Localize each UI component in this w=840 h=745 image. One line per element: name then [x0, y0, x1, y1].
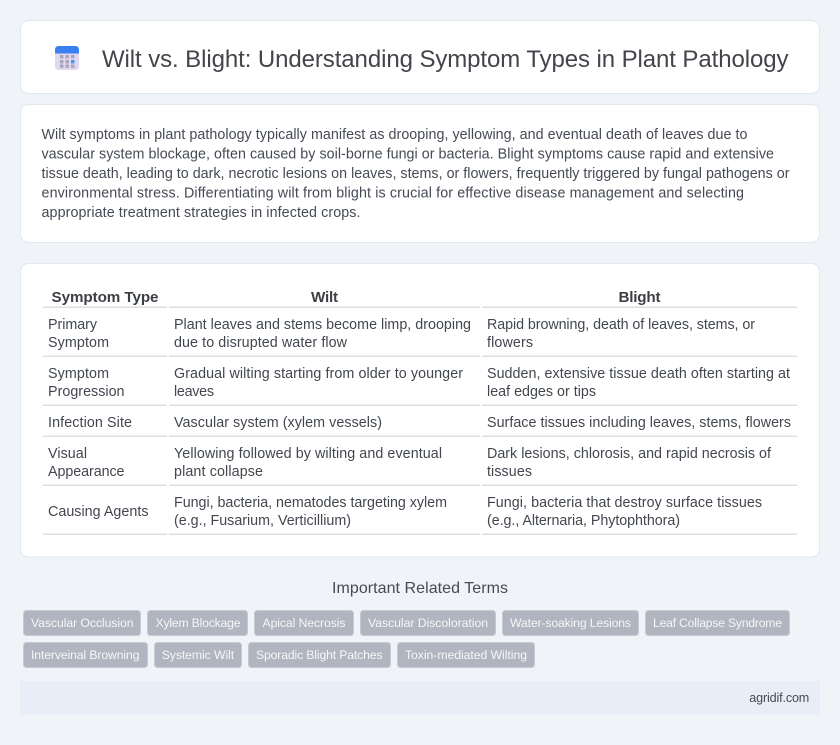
tag: xylem blockage: Xylem Blockage [156, 616, 241, 630]
table row: primary symptom [43, 317, 797, 357]
table header row: Symptom Type [52, 289, 158, 306]
table row: symptom progression [43, 366, 797, 406]
table row: causing agents: (e.g., Fusarium, Verticillium) [174, 513, 351, 529]
tag: vascular discoloration: Vascular Discoloration [368, 616, 488, 630]
description text: environmental stress. Differentiating wilt from blight is crucial for effective disease management and selecting [42, 186, 744, 202]
tag: xylem blockage [148, 610, 248, 636]
table row: symptom progression: Gradual wilting starting from older to younger [174, 366, 463, 382]
tag: interveinal browning: Interveinal Browning [31, 648, 140, 662]
table row: symptom progression: Symptom [48, 366, 109, 382]
table row: symptom progression: leaves [174, 384, 214, 400]
table row: infection site: Surface tissues including leaves, stems, flowers [487, 415, 791, 431]
footer source label: agridif.com [749, 691, 809, 705]
table row: causing agents: Fungi, bacteria that destroy surface tissues [487, 495, 762, 511]
table row: visual appearance: Visual [48, 446, 87, 462]
icon: calendar [55, 46, 79, 70]
tag: systemic wilt: Systemic Wilt [162, 648, 235, 662]
table row: causing agents: (e.g., Alternaria, Phytophthora) [487, 513, 680, 529]
table row: visual appearance: Yellowing followed by wilting and eventual [174, 446, 442, 462]
tag: leaf collapse syndrome: Leaf Collapse Syndrome [653, 616, 782, 630]
table header row: Blight [618, 289, 660, 306]
table row: infection site [43, 415, 797, 437]
tag: vascular discoloration [360, 610, 496, 636]
tag: water-soaking lesions: Water-soaking Lesions [510, 616, 631, 630]
title: Wilt vs. Blight: Understanding Symptom Types in Plant Pathology [102, 46, 788, 73]
table row: causing agents: Fungi, bacteria, nematodes targeting xylem [174, 495, 447, 511]
table row: primary symptom: due to disrupted water flow [174, 335, 348, 351]
table row: primary symptom: Plant leaves and stems become limp, drooping [174, 317, 471, 333]
table row: symptom progression: Sudden, extensive tissue death often starting at [487, 366, 790, 382]
tag: apical necrosis: Apical Necrosis [262, 616, 346, 630]
table row: primary symptom: flowers [487, 335, 533, 351]
panel: description [20, 104, 820, 242]
footer [20, 681, 820, 714]
panel: header [20, 20, 820, 94]
table row: infection site: Infection Site [48, 415, 132, 431]
tag: sporadic blight patches [248, 642, 390, 668]
table row: visual appearance: Dark lesions, chlorosis, and rapid necrosis of [487, 446, 771, 462]
panel: related term tags [24, 610, 790, 668]
tag: toxin-mediated wilting [398, 642, 534, 668]
table row: visual appearance: Appearance [48, 464, 125, 480]
table row: visual appearance: plant collapse [174, 464, 263, 480]
tag: interveinal browning [24, 642, 148, 668]
table row: visual appearance [43, 446, 797, 486]
table header row: Wilt [311, 289, 338, 306]
table row: symptom progression: leaf edges or tips [487, 384, 596, 400]
table row: causing agents [43, 495, 797, 535]
description text: Wilt symptoms in plant pathology typically manifest as drooping, yellowing, and eventual death of leaves due to [42, 127, 748, 143]
tag: leaf collapse syndrome [646, 610, 790, 636]
table row: primary symptom: Rapid browning, death of leaves, stems, or [487, 317, 755, 333]
tag: vascular occlusion [24, 610, 140, 636]
table row: symptom progression: Progression [48, 384, 125, 400]
table header row [43, 289, 797, 308]
table row: visual appearance: tissues [487, 464, 532, 480]
table row: infection site: Vascular system (xylem vessels) [174, 415, 382, 431]
tag: vascular occlusion: Vascular Occlusion [31, 616, 134, 630]
description text: vascular system blockage, often caused by soil-borne fungi or bacteria. Blight symptoms cause rapid and extensive [42, 146, 774, 162]
tag: systemic wilt [154, 642, 242, 668]
description text [42, 127, 790, 221]
table row: primary symptom: Primary [48, 317, 98, 333]
panel: comparison table [20, 264, 820, 557]
tag: water-soaking lesions [502, 610, 638, 636]
heading: important related terms: Important Related Terms [332, 580, 508, 597]
description text: tissue death, leading to dark, necrotic lesions on leaves, stems, or flowers, frequently triggered by fungal pathogens or [42, 166, 790, 182]
description text: appropriate treatment strategies in infected crops. [42, 205, 360, 221]
tag: toxin-mediated wilting: Toxin-mediated Wilting [405, 648, 527, 662]
table row: causing agents: Causing Agents [48, 504, 148, 520]
table row: primary symptom: Symptom [48, 335, 109, 351]
tag: sporadic blight patches: Sporadic Blight Patches [256, 648, 382, 662]
tag: apical necrosis [254, 610, 354, 636]
